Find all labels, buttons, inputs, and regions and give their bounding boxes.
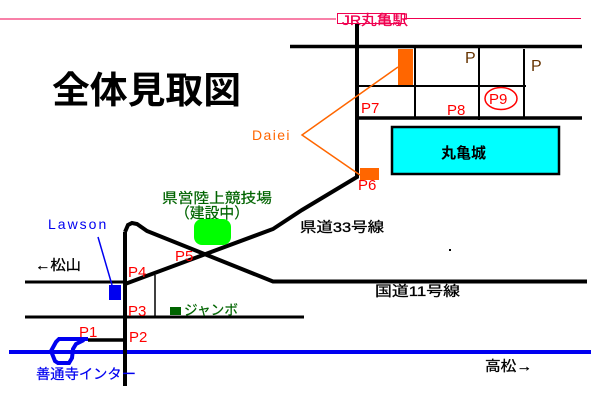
Daiei store markers [360,49,413,180]
road vertical redraw at crossing [123,345,127,360]
small dot [449,249,451,251]
parking labels: P4 [128,264,146,281]
main north-south road [123,232,127,386]
Lawson marker [109,285,121,300]
parking labels: P5 [175,248,193,265]
parking labels [79,100,465,346]
parking labels: P8 [447,102,465,119]
stadium label [162,190,272,222]
interchange loop [51,339,88,363]
prefectural road 33 and station street [125,24,357,284]
Takamatsu direction: 高松→ [485,358,532,374]
interchange label: 善通寺インター [36,366,136,382]
parking labels: P7 [361,100,379,117]
Daiei label: Daiei [252,127,291,143]
Jumbo label: ジャンボ [184,302,238,318]
national road 11 [125,223,587,282]
parking labels: P6 [358,177,376,194]
parking labels: P2 [129,329,147,346]
side roads [25,275,304,340]
title: 全体見取図 [52,70,241,111]
stadium label: （建設中） [175,205,249,222]
national road label: 国道11号線 [375,283,460,299]
P9 circled parking: P9 [489,91,507,108]
brown parking labels: P [465,50,476,67]
P9 circled parking [485,88,517,110]
prefectural road label: 県道33号線 [300,219,384,235]
Matsuyama direction: ←松山 [35,257,81,273]
brown parking labels [465,50,542,75]
Lawson label: Lawson [48,216,108,232]
Marugame castle [392,127,559,174]
parking labels: P3 [128,303,146,320]
stadium label: 県営陸上競技場 [162,190,272,206]
railway line with station label: JR丸亀駅 [342,12,408,28]
stadium marker [194,219,231,245]
parking labels: P1 [79,324,97,341]
expressway [9,350,591,354]
brown parking labels: P [531,58,542,75]
railway line with station label [0,12,581,28]
Marugame castle: 丸亀城 [441,144,486,162]
Daiei leader lines [302,67,398,175]
Lawson leader line [98,237,112,285]
city street grid [290,46,582,120]
